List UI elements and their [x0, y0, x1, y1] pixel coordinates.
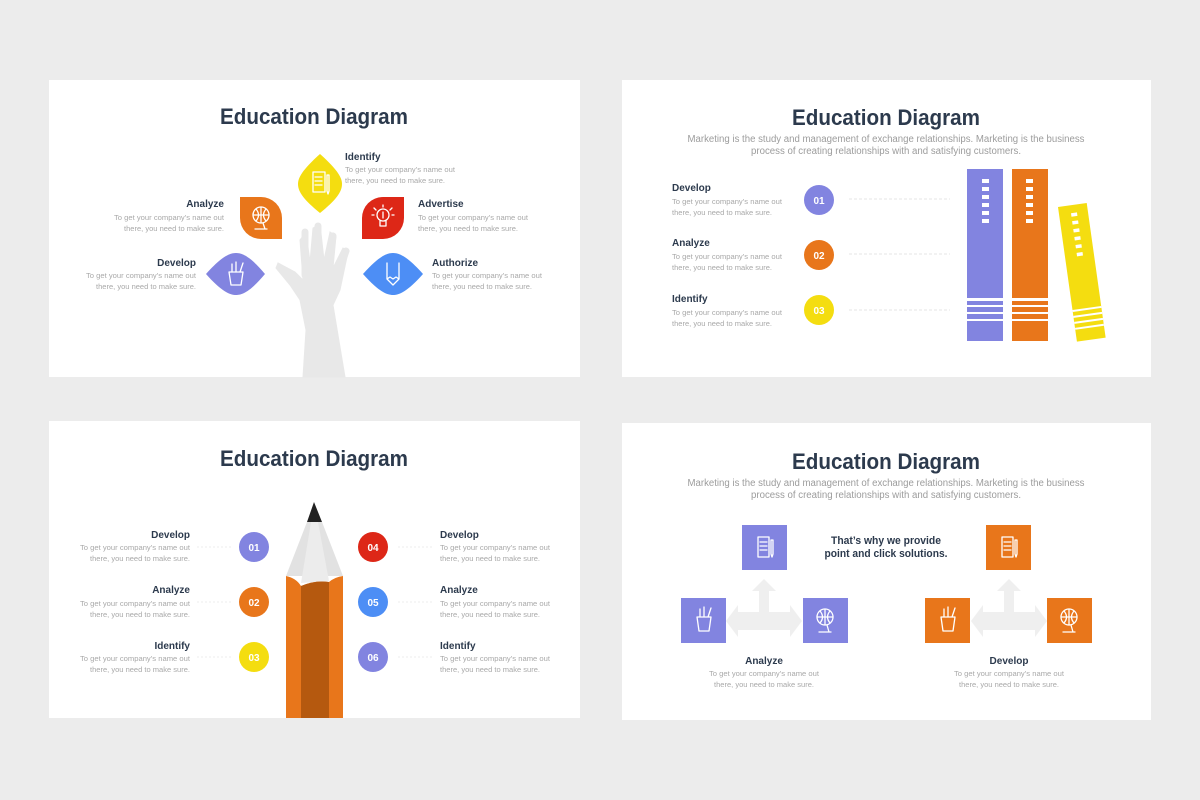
- item: analyze: there, you need to make sure.: [672, 263, 772, 272]
- text: analyze: [709, 656, 820, 689]
- text: authorize: To get your company’s name out: [432, 271, 543, 280]
- panel: arrows diagram: [622, 423, 1151, 720]
- text: analyze: Analyze: [745, 656, 783, 667]
- text: authorize: [432, 258, 543, 291]
- number circles: 03: [813, 306, 825, 317]
- pencil: [286, 502, 343, 718]
- item: develop: there, you need to make sure.: [672, 208, 772, 217]
- text: analyze: Analyze: [186, 199, 224, 210]
- subtitle: Marketing is the study and management of exchange relationships. Marketing is the business: [688, 478, 1084, 489]
- right texts: there, you need to make sure.: [440, 554, 540, 563]
- right texts: there, you need to make sure.: [440, 665, 540, 674]
- icon: orange leaf analyze: [240, 197, 282, 239]
- text: develop: there, you need to make sure.: [96, 282, 196, 291]
- item: analyze: To get your company’s name out: [672, 252, 783, 261]
- text: analyze: [114, 199, 225, 233]
- number circles: [804, 185, 834, 325]
- text: advertise: there, you need to make sure.: [418, 224, 518, 233]
- text: authorize: there, you need to make sure.: [432, 282, 532, 291]
- text: develop: To get your company’s name out: [86, 271, 197, 280]
- subtitle: process of creating relationships with and satisfying customers.: [751, 490, 1021, 501]
- callout text: That’s why we provide: [831, 535, 941, 547]
- text: develop: To get your company’s name out: [954, 669, 1065, 678]
- right texts: [440, 530, 551, 674]
- left texts: [80, 530, 191, 674]
- left texts: To get your company’s name out: [80, 543, 191, 552]
- right texts: Identify: [440, 641, 476, 652]
- left texts: To get your company’s name out: [80, 599, 191, 608]
- text: advertise: To get your company’s name out: [418, 213, 529, 222]
- right texts: Develop: [440, 530, 479, 541]
- item: develop: [672, 183, 783, 217]
- text: advertise: Advertise: [418, 199, 464, 210]
- text: develop: there, you need to make sure.: [959, 680, 1059, 689]
- text: identify: To get your company’s name out: [345, 165, 456, 174]
- dotted connectors: [197, 547, 433, 657]
- left texts: Analyze: [152, 585, 190, 596]
- cluster: analyze (purple): [681, 525, 848, 643]
- left texts: To get your company’s name out: [80, 654, 191, 663]
- number circles: 01: [248, 543, 260, 554]
- left texts: there, you need to make sure.: [90, 665, 190, 674]
- text: analyze: there, you need to make sure.: [714, 680, 814, 689]
- item: identify: there, you need to make sure.: [672, 319, 772, 328]
- text: develop: [954, 656, 1065, 689]
- panel: hand diagram: [49, 80, 580, 377]
- text: identify: there, you need to make sure.: [345, 176, 445, 185]
- right texts: To get your company’s name out: [440, 654, 551, 663]
- text: identify: [345, 152, 456, 185]
- number circles: 02: [248, 598, 260, 609]
- number circles: 04: [367, 543, 379, 554]
- callout text: point and click solutions.: [824, 548, 948, 560]
- number circles: 03: [248, 653, 260, 664]
- title: Education Diagram: [792, 105, 980, 130]
- title: Education Diagram: [792, 449, 980, 474]
- text: authorize: Authorize: [432, 258, 479, 269]
- text: analyze: To get your company’s name out: [709, 669, 820, 678]
- text: develop: Develop: [990, 656, 1028, 667]
- item: identify: Identify: [672, 294, 708, 305]
- number circles: 06: [367, 653, 379, 664]
- subtitle: process of creating relationships with and satisfying customers.: [751, 146, 1021, 157]
- book: purple: [967, 169, 1003, 341]
- number circles: [239, 532, 388, 672]
- right texts: To get your company’s name out: [440, 543, 551, 552]
- subtitle: [688, 134, 1084, 157]
- item: analyze: [672, 238, 783, 272]
- right texts: there, you need to make sure.: [440, 610, 540, 619]
- book: orange: [1012, 169, 1048, 341]
- text: analyze: there, you need to make sure.: [124, 224, 224, 233]
- book: yellow tilted: [1058, 203, 1106, 342]
- text: advertise: [418, 199, 529, 233]
- subtitle: [688, 478, 1084, 501]
- right texts: To get your company’s name out: [440, 599, 551, 608]
- left texts: Identify: [154, 641, 190, 652]
- left texts: there, you need to make sure.: [90, 554, 190, 563]
- text: identify: Identify: [345, 152, 381, 163]
- number circles: 01: [813, 196, 825, 207]
- left texts: there, you need to make sure.: [90, 610, 190, 619]
- text: develop: [86, 258, 197, 291]
- left texts: Develop: [151, 530, 190, 541]
- item: develop: To get your company’s name out: [672, 197, 783, 206]
- title: Education Diagram: [220, 446, 408, 471]
- text: analyze: To get your company’s name out: [114, 213, 225, 222]
- cluster: develop (orange): [925, 525, 1092, 643]
- item: analyze: Analyze: [672, 238, 710, 249]
- item: develop: Develop: [672, 183, 711, 194]
- number circles: 05: [367, 598, 379, 609]
- hand silhouette: [276, 224, 348, 377]
- icon: red leaf advertise: [362, 197, 404, 239]
- icon: purple leaf develop: [206, 253, 265, 295]
- dashed connectors: [849, 199, 950, 310]
- icon: yellow leaf identify: [298, 154, 342, 213]
- number circles: 02: [813, 251, 825, 262]
- text: develop: Develop: [157, 258, 196, 269]
- callout text: [824, 535, 948, 560]
- subtitle: Marketing is the study and management of exchange relationships. Marketing is the business: [688, 134, 1084, 145]
- right texts: Analyze: [440, 585, 478, 596]
- icon: blue leaf authorize: [363, 253, 423, 295]
- title: Education Diagram: [220, 104, 408, 129]
- panel: pencil diagram: [49, 421, 580, 718]
- item: identify: To get your company’s name out: [672, 308, 783, 317]
- item: identify: [672, 294, 783, 328]
- panel: books diagram: [622, 80, 1151, 377]
